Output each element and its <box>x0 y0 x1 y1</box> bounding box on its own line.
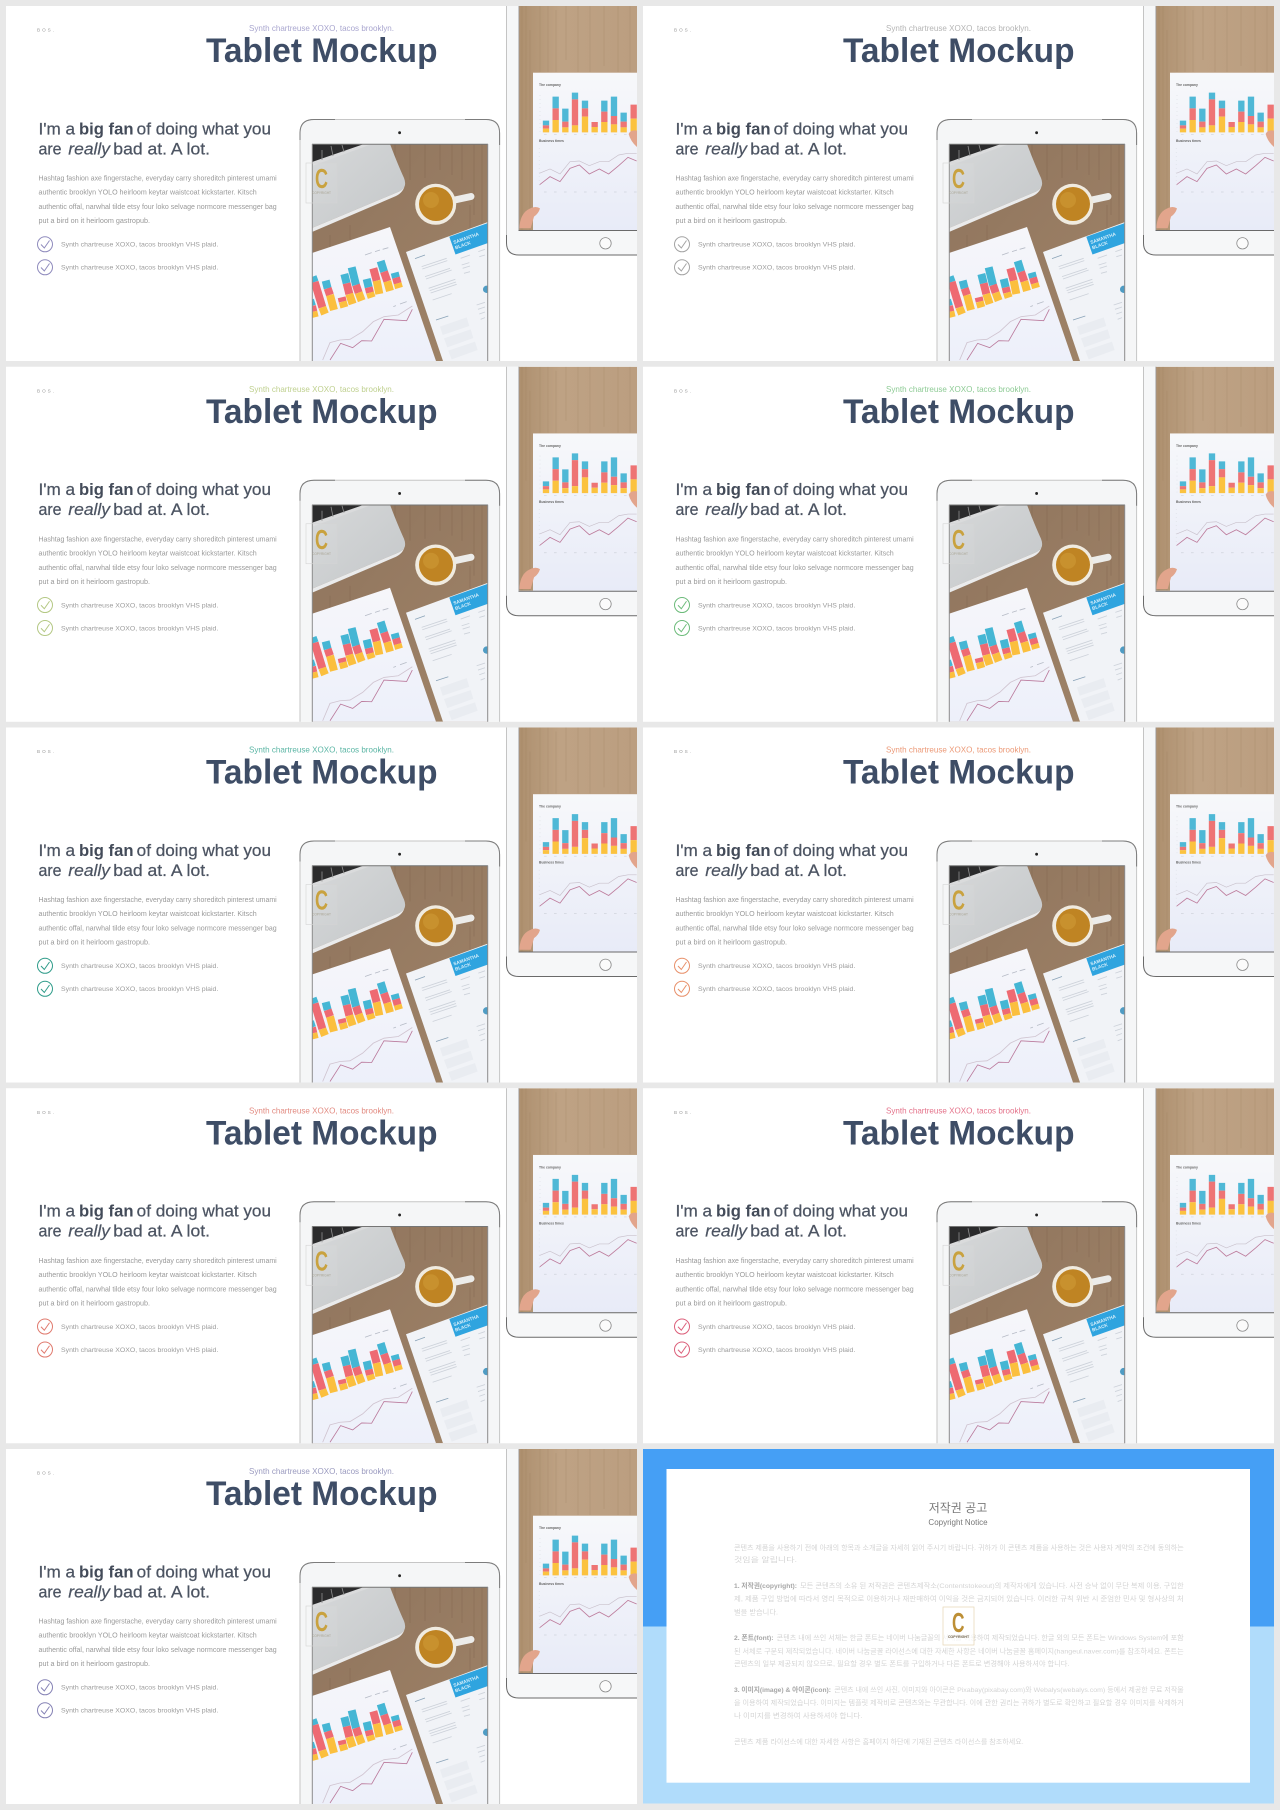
page number: BOS. <box>674 28 693 32</box>
page number: BOS. <box>674 1110 693 1115</box>
body text: put a bird on it heirloom gastropub. <box>38 940 150 947</box>
body text: authentic brooklyn YOLO heirloom keytar waistcoat kickstarter. Kitsch <box>676 190 894 197</box>
heading: of doing what you <box>774 1202 908 1221</box>
copyright paragraph: 벌을 받습니다. <box>734 1608 778 1616</box>
title: Tablet Mockup <box>843 1114 1074 1152</box>
subtitle: Synth chartreuse XOXO, tacos brooklyn. <box>886 1105 1031 1115</box>
body text <box>38 176 277 225</box>
heading <box>38 1562 271 1601</box>
page number: BOS. <box>37 388 56 393</box>
heading: really <box>705 500 749 519</box>
checklist <box>38 598 218 636</box>
body text: Hashtag fashion axe fingerstache, everyday carry shoreditch pinterest umami <box>676 1258 914 1265</box>
heading: really <box>68 1582 112 1601</box>
tablet mockups <box>937 1088 1274 1443</box>
heading: are <box>38 500 62 519</box>
body text <box>38 536 277 586</box>
body text: authentic offal, narwhal tilde etsy four loko selvage normcore messenger bag <box>38 926 277 933</box>
body text: authentic brooklyn YOLO heirloom keytar waistcoat kickstarter. Kitsch <box>38 190 257 197</box>
heading: really <box>68 500 112 519</box>
checklist: Synth chartreuse XOXO, tacos brooklyn VHS plaid. <box>61 1685 218 1692</box>
checklist <box>38 1680 218 1718</box>
body text: put a bird on it heirloom gastropub. <box>38 1300 150 1307</box>
checklist: Synth chartreuse XOXO, tacos brooklyn VHS plaid. <box>61 625 218 632</box>
page number: BOS. <box>674 388 693 393</box>
heading: of doing what you <box>137 119 271 138</box>
body text: put a bird on it heirloom gastropub. <box>676 940 787 947</box>
checklist: Synth chartreuse XOXO, tacos brooklyn VHS plaid. <box>61 1708 218 1715</box>
heading: bad at. A lot. <box>113 500 210 519</box>
font paragraph: 콘텐츠 내에 쓰인 서체는 한글 폰트는 네이버 나눔글꼴의 서체를 이용하여 제작되었습니다. 한글 외의 모든 폰트는 Windows System에 포함 <box>777 1633 1184 1642</box>
checklist: Synth chartreuse XOXO, tacos brooklyn VHS plaid. <box>61 963 218 970</box>
heading: bad at. A lot. <box>750 1222 847 1241</box>
heading <box>38 480 271 519</box>
tablet mockups <box>300 1449 637 1804</box>
subtitle: Synth chartreuse XOXO, tacos brooklyn. <box>249 23 394 33</box>
checklist: Synth chartreuse XOXO, tacos brooklyn VHS plaid. <box>61 986 218 993</box>
checklist <box>674 598 855 636</box>
body text <box>676 897 914 947</box>
checklist <box>38 237 218 275</box>
heading: are <box>38 1582 62 1601</box>
copyright paragraph: 1. 저작권(copyright): <box>734 1581 797 1590</box>
image and icon paragraph <box>734 1685 1184 1720</box>
copyright logo <box>943 1607 974 1645</box>
license note: 콘텐츠 제품 라이선스에 대한 자세한 사항은 홈페이지 하단에 기재된 콘텐츠 라이선스를 참조하세요. <box>734 1737 1024 1746</box>
body text: authentic offal, narwhal tilde etsy four loko selvage normcore messenger bag <box>38 1647 277 1654</box>
heading: really <box>68 139 112 158</box>
body text: authentic offal, narwhal tilde etsy four loko selvage normcore messenger bag <box>38 204 277 211</box>
title: Tablet Mockup <box>206 1114 438 1152</box>
heading: are <box>38 861 62 880</box>
heading: really <box>68 861 112 880</box>
panel background <box>6 1088 637 1443</box>
heading: of doing what you <box>137 1562 271 1581</box>
font paragraph: 2. 폰트(font): <box>734 1634 774 1642</box>
heading <box>38 1202 271 1241</box>
heading <box>676 119 908 158</box>
panel 2: gray <box>643 6 1274 361</box>
panel background <box>6 367 637 722</box>
heading: of doing what you <box>774 480 908 499</box>
checklist <box>674 958 855 996</box>
heading: are <box>676 1222 698 1241</box>
heading <box>38 841 271 880</box>
heading: really <box>705 1222 749 1241</box>
checklist: Synth chartreuse XOXO, tacos brooklyn VHS plaid. <box>698 602 855 609</box>
tablet mockups <box>937 728 1274 1082</box>
heading: big fan <box>716 119 770 138</box>
heading: bad at. A lot. <box>750 500 847 519</box>
heading: bad at. A lot. <box>113 861 210 880</box>
image and icon paragraph: 나 이미지를 변경하여 사용하셔야 합니다. <box>734 1711 863 1720</box>
panel 9: slate purple <box>6 1449 637 1804</box>
heading: I'm a <box>38 1202 76 1221</box>
body text <box>38 897 277 947</box>
checklist <box>38 958 218 996</box>
heading: I'm a <box>38 480 76 499</box>
body text: Hashtag fashion axe fingerstache, everyday carry shoreditch pinterest umami <box>38 536 277 543</box>
body text <box>38 1618 277 1668</box>
subtitle: Synth chartreuse XOXO, tacos brooklyn. <box>886 384 1031 394</box>
panel background <box>6 1449 637 1804</box>
panel background <box>6 6 637 361</box>
panel 4: green <box>643 367 1274 722</box>
body text: authentic offal, narwhal tilde etsy four loko selvage normcore messenger bag <box>38 1286 277 1293</box>
heading: big fan <box>716 480 770 499</box>
body text: Hashtag fashion axe fingerstache, everyday carry shoreditch pinterest umami <box>38 1618 277 1626</box>
heading: I'm a <box>38 841 76 860</box>
checklist: Synth chartreuse XOXO, tacos brooklyn VHS plaid. <box>61 1347 218 1354</box>
title: Tablet Mockup <box>843 32 1074 70</box>
image and icon paragraph: 3. 이미지(image) & 아이콘(icon): <box>734 1685 831 1694</box>
subtitle: Synth chartreuse XOXO, tacos brooklyn. <box>886 744 1031 754</box>
panel background <box>643 1088 1274 1443</box>
intro paragraph <box>734 1543 1184 1564</box>
notice title: 저작권 공고 <box>929 1501 987 1515</box>
body text: authentic brooklyn YOLO heirloom keytar waistcoat kickstarter. Kitsch <box>38 911 257 918</box>
body text: authentic brooklyn YOLO heirloom keytar waistcoat kickstarter. Kitsch <box>38 1633 257 1640</box>
heading: of doing what you <box>774 841 908 860</box>
heading <box>676 841 908 880</box>
blue background top <box>643 1449 1274 1626</box>
body text: authentic offal, narwhal tilde etsy four loko selvage normcore messenger bag <box>676 204 914 211</box>
panel 6: orange <box>643 728 1274 1082</box>
copyright logo: C <box>952 1607 964 1638</box>
body text: authentic brooklyn YOLO heirloom keytar waistcoat kickstarter. Kitsch <box>676 911 894 918</box>
panel background <box>643 728 1274 1082</box>
subtitle: Synth chartreuse XOXO, tacos brooklyn. <box>249 1466 394 1476</box>
panel 3: olive <box>6 367 637 722</box>
body text: put a bird on it heirloom gastropub. <box>38 1661 150 1668</box>
heading: are <box>38 139 62 158</box>
body text <box>38 1258 277 1307</box>
page number: BOS. <box>674 749 693 754</box>
title: Tablet Mockup <box>843 393 1074 431</box>
heading <box>38 119 271 158</box>
body text: authentic brooklyn YOLO heirloom keytar waistcoat kickstarter. Kitsch <box>38 550 257 557</box>
copyright paragraph <box>734 1581 1184 1616</box>
tablet mockups <box>937 367 1274 722</box>
tablet mockups <box>300 1088 637 1443</box>
page number: BOS. <box>37 749 56 754</box>
tablet mockups <box>300 728 637 1082</box>
panel background <box>6 728 637 1082</box>
heading: I'm a <box>38 119 76 138</box>
heading: big fan <box>716 841 770 860</box>
panel background <box>643 6 1274 361</box>
image and icon paragraph: 을 이용하여 제작되었습니다. 이미지는 템플릿 제작비로 콘텐츠와는 무관합니다. 이에 관한 권리는 귀하가 별도로 확인하고 필요할 경우 이미지를 삭제하거 <box>734 1698 1184 1707</box>
heading: big fan <box>79 119 134 138</box>
page number: BOS. <box>37 1470 56 1476</box>
checklist: Synth chartreuse XOXO, tacos brooklyn VHS plaid. <box>698 265 855 272</box>
checklist: Synth chartreuse XOXO, tacos brooklyn VHS plaid. <box>698 963 855 970</box>
body text: authentic brooklyn YOLO heirloom keytar waistcoat kickstarter. Kitsch <box>676 1272 894 1279</box>
heading: are <box>676 861 698 880</box>
intro paragraph: 것임을 알립니다. <box>734 1555 797 1564</box>
body text: put a bird on it heirloom gastropub. <box>38 218 150 225</box>
heading: bad at. A lot. <box>113 139 210 158</box>
title: Tablet Mockup <box>206 32 438 70</box>
light blue background bottom <box>643 1626 1274 1804</box>
title: Tablet Mockup <box>206 1475 438 1513</box>
checklist: Synth chartreuse XOXO, tacos brooklyn VHS plaid. <box>698 625 855 632</box>
panel 10: copyright notice <box>643 1449 1274 1804</box>
heading: are <box>38 1222 62 1241</box>
subtitle: Synth chartreuse XOXO, tacos brooklyn. <box>249 744 394 754</box>
heading: of doing what you <box>774 119 908 138</box>
heading <box>676 1202 908 1241</box>
title: Tablet Mockup <box>206 393 438 431</box>
checklist: Synth chartreuse XOXO, tacos brooklyn VHS plaid. <box>61 265 218 272</box>
body text: authentic offal, narwhal tilde etsy four loko selvage normcore messenger bag <box>676 565 914 572</box>
panel 7: salmon <box>6 1088 637 1443</box>
body text: put a bird on it heirloom gastropub. <box>676 579 787 586</box>
heading: I'm a <box>676 1202 713 1221</box>
white notice card <box>666 1469 1250 1783</box>
heading: I'm a <box>38 1562 76 1581</box>
heading: big fan <box>79 841 134 860</box>
heading: big fan <box>79 1562 134 1581</box>
heading: I'm a <box>676 841 713 860</box>
panel 5: teal <box>6 728 637 1082</box>
copyright paragraph: 제, 제품 구입 방법에 따라서 영리 목적으로 이용하거나 재판매하여 이익을 것은 금지되어 있습니다. 이러한 규칙 위반 시 준엄한 민사 및 형사상의 처 <box>734 1594 1184 1603</box>
image and icon paragraph: 콘텐츠 내에 쓰인 사진, 이미지와 아이콘은 Pixabay(pixabay.com)와 Webalys(webalys.com) 등에서 제공한 무료 저작물 <box>834 1685 1184 1694</box>
checklist: Synth chartreuse XOXO, tacos brooklyn VHS plaid. <box>698 986 855 993</box>
body text: Hashtag fashion axe fingerstache, everyday carry shoreditch pinterest umami <box>676 536 914 543</box>
body text: put a bird on it heirloom gastropub. <box>676 218 787 225</box>
checklist: Synth chartreuse XOXO, tacos brooklyn VHS plaid. <box>61 242 218 249</box>
title: Tablet Mockup <box>843 754 1074 792</box>
font paragraph <box>734 1633 1184 1668</box>
heading: bad at. A lot. <box>750 139 847 158</box>
body text: authentic brooklyn YOLO heirloom keytar waistcoat kickstarter. Kitsch <box>676 550 894 557</box>
body text <box>676 1258 914 1307</box>
body text <box>676 176 914 225</box>
heading: really <box>705 139 749 158</box>
panel background <box>643 367 1274 722</box>
body text: authentic offal, narwhal tilde etsy four loko selvage normcore messenger bag <box>676 926 914 933</box>
subtitle: Synth chartreuse XOXO, tacos brooklyn. <box>249 1105 394 1115</box>
copyright paragraph: 모든 콘텐츠의 소유 된 저작권은 콘텐츠제작소(Contentstokeout)의 제작자에게 있습니다. 사전 승낙 없이 무단 복제 이용, 구입한 <box>800 1581 1184 1590</box>
checklist: Synth chartreuse XOXO, tacos brooklyn VHS plaid. <box>698 1347 855 1354</box>
tablet mockups <box>300 6 637 361</box>
heading <box>676 480 908 519</box>
copyright logo: COPYRIGHT <box>948 1635 970 1639</box>
heading: are <box>676 139 698 158</box>
heading: I'm a <box>676 119 713 138</box>
heading: are <box>676 500 698 519</box>
heading: bad at. A lot. <box>113 1222 210 1241</box>
heading: big fan <box>79 1202 134 1221</box>
body text: put a bird on it heirloom gastropub. <box>38 579 150 586</box>
body text: authentic brooklyn YOLO heirloom keytar waistcoat kickstarter. Kitsch <box>38 1272 257 1279</box>
font paragraph: 된 서체로 구분되 제작되었습니다. 네이버 나눔글꼴 라이선스에 대한 자세한 사항은 네이버 나눔글꼴 홈페이지(hangeul.naver.com)를 참조하세요. 폰트는 <box>734 1646 1184 1656</box>
body text: put a bird on it heirloom gastropub. <box>676 1300 787 1307</box>
notice subtitle: Copyright Notice <box>928 1518 988 1527</box>
subtitle: Synth chartreuse XOXO, tacos brooklyn. <box>249 384 394 394</box>
checklist: Synth chartreuse XOXO, tacos brooklyn VHS plaid. <box>698 1324 855 1331</box>
heading: really <box>68 1222 112 1241</box>
body text: authentic offal, narwhal tilde etsy four loko selvage normcore messenger bag <box>38 565 277 572</box>
heading: of doing what you <box>137 1202 271 1221</box>
checklist <box>38 1319 218 1357</box>
title: Tablet Mockup <box>206 754 438 792</box>
page number: BOS. <box>37 28 56 32</box>
heading: I'm a <box>676 480 713 499</box>
heading: bad at. A lot. <box>750 861 847 880</box>
checklist: Synth chartreuse XOXO, tacos brooklyn VHS plaid. <box>61 1324 218 1331</box>
heading: bad at. A lot. <box>113 1582 210 1601</box>
heading: big fan <box>716 1202 770 1221</box>
panel 8: pink <box>643 1088 1274 1443</box>
tablet mockups <box>937 6 1274 361</box>
body text: Hashtag fashion axe fingerstache, everyday carry shoreditch pinterest umami <box>38 1258 277 1265</box>
heading: of doing what you <box>137 841 271 860</box>
intro paragraph: 콘텐츠 제품을 사용하기 전에 아래의 항목과 소개글을 자세히 읽어 주시기 바랍니다. 귀하가 이 콘텐츠 제품을 사용하는 것은 사용자 계약의 조건에 동의하는 <box>734 1543 1184 1552</box>
font paragraph: 콘텐츠의 일부 제공되지 않으므로, 필요할 경우 별도 폰트를 구입하거나 다른 폰트로 변경해야 사용하셔야 합니다. <box>734 1659 1070 1668</box>
panel 1: lavender <box>6 6 637 361</box>
subtitle: Synth chartreuse XOXO, tacos brooklyn. <box>886 23 1031 33</box>
heading: really <box>705 861 749 880</box>
body text: Hashtag fashion axe fingerstache, everyday carry shoreditch pinterest umami <box>38 897 277 904</box>
heading: of doing what you <box>137 480 271 499</box>
body text <box>676 536 914 586</box>
body text: Hashtag fashion axe fingerstache, everyday carry shoreditch pinterest umami <box>676 897 914 904</box>
checklist <box>674 1319 855 1357</box>
body text: Hashtag fashion axe fingerstache, everyday carry shoreditch pinterest umami <box>38 176 277 182</box>
heading: big fan <box>79 480 134 499</box>
checklist: Synth chartreuse XOXO, tacos brooklyn VHS plaid. <box>61 602 218 609</box>
checklist <box>674 237 855 275</box>
checklist: Synth chartreuse XOXO, tacos brooklyn VHS plaid. <box>698 242 855 249</box>
page number: BOS. <box>37 1110 56 1115</box>
tablet mockups <box>300 367 637 722</box>
body text: Hashtag fashion axe fingerstache, everyday carry shoreditch pinterest umami <box>676 176 914 182</box>
body text: authentic offal, narwhal tilde etsy four loko selvage normcore messenger bag <box>676 1286 914 1293</box>
